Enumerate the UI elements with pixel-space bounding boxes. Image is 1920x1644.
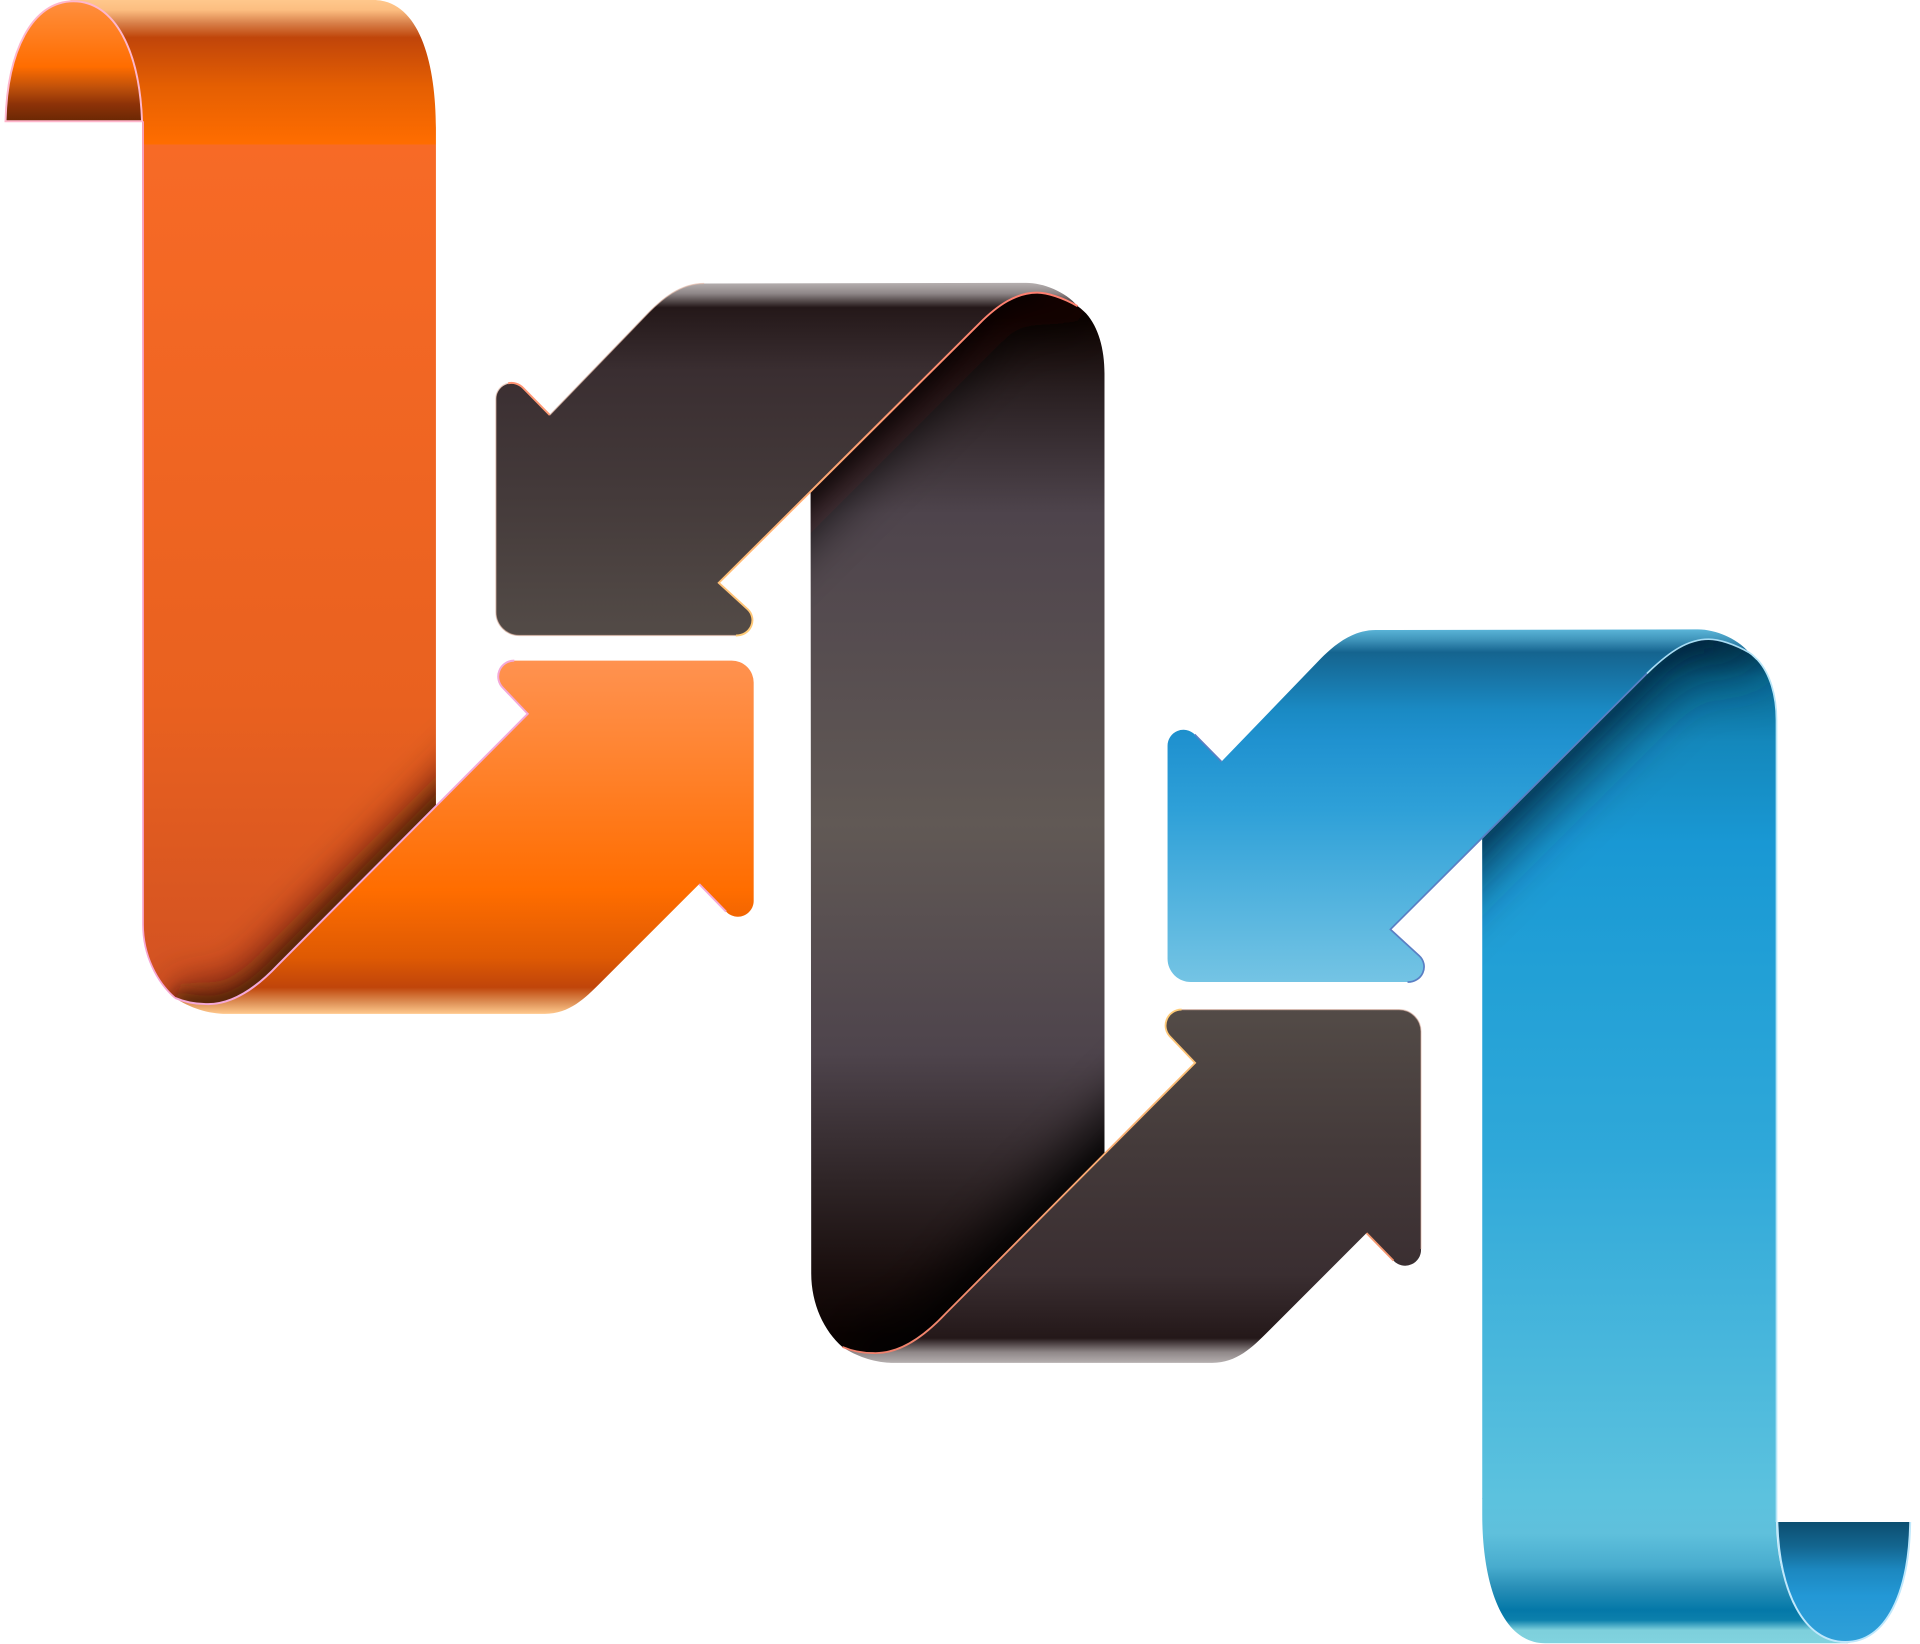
blue fold edge highlight — [1647, 639, 1749, 673]
blue bottom fold band — [1482, 1498, 1851, 1643]
dark upper arrow pale outline — [496, 283, 736, 636]
dark ribbon — [496, 283, 1421, 1363]
orange arrow edge highlight — [175, 661, 726, 1004]
dark lower arrow pale outline — [1182, 1010, 1421, 1249]
blue arrow edge highlight — [1195, 673, 1647, 982]
blue right edge highlight — [1749, 653, 1776, 1522]
blue fold shadow — [1482, 640, 1770, 932]
blue ribbon — [1168, 629, 1910, 1643]
orange vertical body — [142, 144, 436, 1004]
blue flap edge highlight — [1777, 1522, 1910, 1642]
dark lower arrow — [842, 1010, 1421, 1363]
orange diagonal arrow — [175, 661, 754, 1014]
dark lower arrow edge highlight — [842, 1010, 1393, 1353]
orange top fold band — [67, 0, 436, 144]
blue vertical body — [1482, 639, 1776, 1499]
blue bottom flap — [1777, 1522, 1910, 1642]
orange ribbon — [6, 0, 754, 1014]
orange left edge highlight — [143, 121, 175, 998]
dark fold shadows — [810, 306, 1104, 1352]
dark upper arrow — [496, 283, 1078, 636]
dark upper arrow edge highlight — [508, 293, 1078, 636]
orange top flap — [6, 1, 142, 121]
orange fold shadow — [158, 738, 436, 1004]
blue diagonal arrow — [1168, 629, 1749, 982]
dark vertical body — [811, 293, 1104, 1353]
